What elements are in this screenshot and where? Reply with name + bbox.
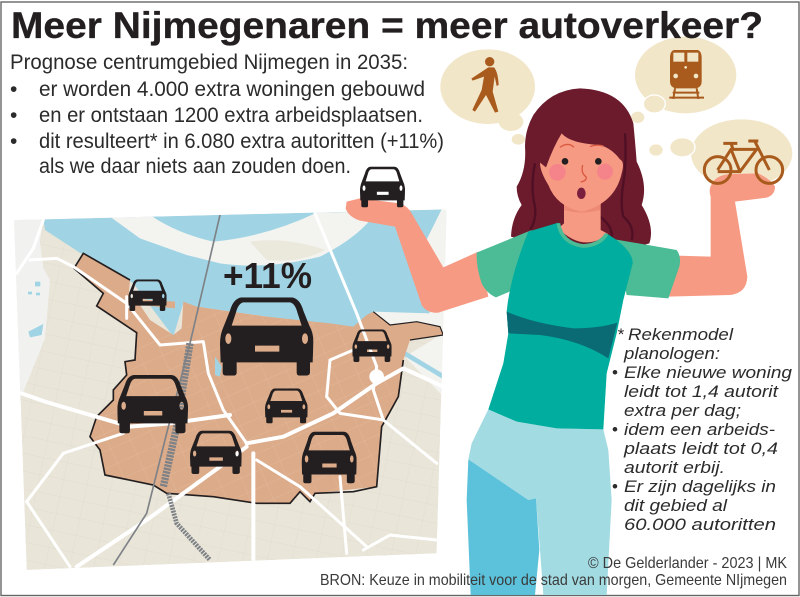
intro text: [10, 51, 444, 178]
map percentage label: +11%: [223, 255, 312, 296]
footnote: rekenmodel: •: [612, 477, 618, 496]
ponds in centrum: [215, 357, 222, 377]
footnote: rekenmodel: Er zijn dagelijks in: [624, 477, 776, 496]
footnote: rekenmodel: autorit erbij.: [624, 458, 725, 477]
car east: [352, 329, 392, 362]
footnote: rekenmodel: plaats leidt tot 0,4: [623, 439, 778, 458]
left arm with hand: [346, 198, 488, 313]
footnote: rekenmodel: [612, 325, 793, 534]
eyes: [562, 158, 602, 165]
car south: [190, 431, 242, 474]
main roads: [17, 213, 443, 567]
icon: train: [669, 50, 704, 99]
neck shadow: [564, 205, 601, 212]
eyebrows and nose: [560, 144, 603, 182]
intro text: •: [10, 130, 17, 153]
thought bubbles and woman: [346, 37, 792, 595]
intro text: en er ontstaan 1200 extra arbeidsplaatsen.: [39, 104, 423, 127]
railway: [113, 215, 220, 565]
intro text: •: [10, 78, 17, 101]
footnote: rekenmodel: leidt tot 1,4 autorit: [624, 382, 779, 401]
map of Nijmegen: [14, 209, 448, 570]
bubble: bike: [649, 119, 792, 187]
boundary line east: [373, 312, 443, 340]
footnote: rekenmodel: *: [617, 325, 625, 344]
hair: [511, 88, 651, 250]
east bank: [373, 209, 448, 397]
neck: [558, 203, 608, 242]
mouth: [577, 188, 586, 199]
footnote: rekenmodel: 60.000 autoritten: [624, 515, 776, 534]
street grid: [14, 209, 447, 570]
title: Meer Nijmegenaren = meer autoverkeer?: [11, 4, 763, 46]
river Waal: [43, 209, 442, 337]
intro text: •: [10, 104, 17, 127]
intro text: dit resulteert* in 6.080 extra autoritten (+11%): [39, 130, 444, 153]
beige island patch: [250, 240, 325, 261]
shirt torso: [488, 223, 633, 429]
car in hand: [360, 167, 405, 207]
ponds: [28, 282, 43, 337]
sleeves: [477, 230, 680, 298]
icon: bicycle: [704, 141, 783, 183]
map land: [14, 209, 447, 570]
car large: [220, 297, 313, 376]
right arm with hand: [668, 173, 775, 297]
footnote: rekenmodel: planologen:: [623, 344, 720, 363]
footnote: rekenmodel: •: [612, 363, 618, 382]
car west: [117, 375, 188, 433]
intro text: Prognose centrumgebied Nijmegen in 2035:: [10, 51, 408, 74]
icon: pedestrian: [471, 57, 499, 113]
western park area: [14, 218, 50, 392]
bubble: train: [631, 37, 736, 123]
river island: [110, 212, 377, 266]
intro text: er worden 4.000 extra woningen gebouwd: [39, 78, 425, 101]
footnote: rekenmodel: idem een arbeids-: [624, 420, 775, 439]
shirt collar: [558, 223, 607, 246]
car centre: [265, 388, 308, 423]
cheeks: [549, 164, 613, 181]
hair strands: [530, 133, 632, 240]
footnote: rekenmodel: •: [612, 420, 618, 439]
car north-west: [128, 279, 167, 311]
canal: [404, 352, 442, 378]
footnote: rekenmodel: Elke nieuwe woning: [624, 363, 793, 382]
trousers dark: [467, 459, 539, 595]
car south-east: [302, 432, 357, 483]
centrum area: [74, 253, 443, 503]
centrum street grid: [90, 307, 398, 503]
boundary line west: [74, 253, 403, 503]
face: [540, 133, 623, 212]
cars on map: [117, 279, 392, 483]
trousers light: [468, 409, 612, 595]
footnote: rekenmodel: extra per dag;: [624, 401, 741, 420]
footnote: rekenmodel: dit gebied al: [624, 496, 728, 515]
bubble: walking: [440, 49, 535, 145]
belt: [507, 312, 617, 358]
footnote: rekenmodel: Rekenmodel: [628, 325, 734, 344]
intro text: als we daar niets aan zouden doen.: [39, 155, 351, 178]
